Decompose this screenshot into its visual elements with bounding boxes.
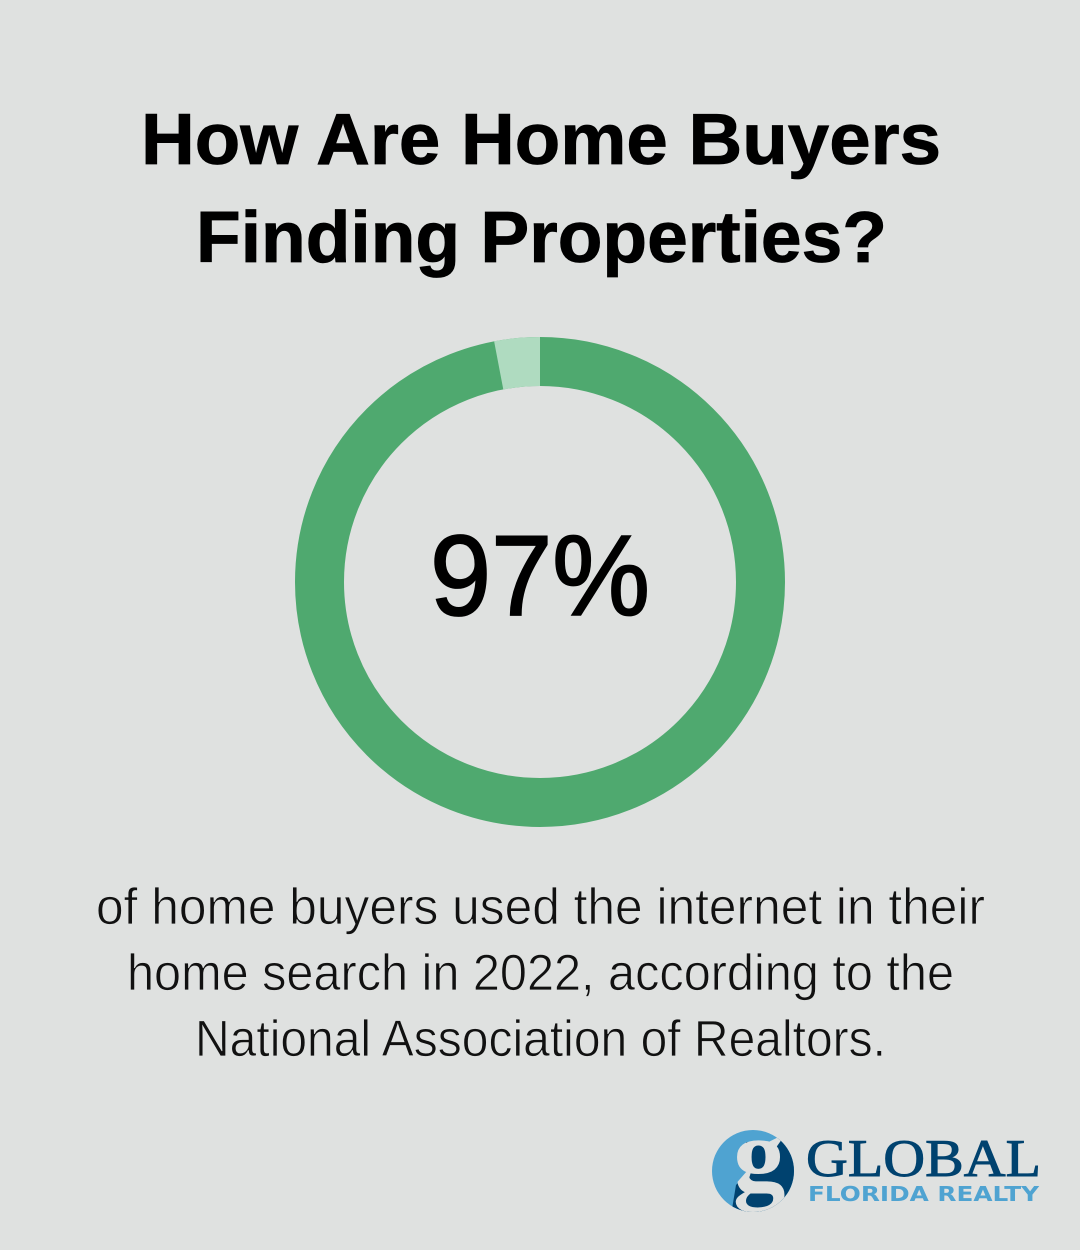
icon: g monogram circle: g — [733, 1096, 786, 1213]
description text: National Association of Realtors. — [195, 1010, 886, 1067]
title: How Are Home Buyers — [141, 100, 941, 180]
wordmark: GLOBAL: GLOBAL — [806, 1130, 1041, 1188]
wordmark: FLORIDA REALTY: FLORIDA REALTY — [808, 1182, 1040, 1206]
title — [141, 100, 941, 278]
donut chart: 97% — [320, 337, 760, 802]
icon: g monogram circle — [712, 1130, 794, 1212]
center value: 97% — [430, 513, 650, 640]
title: Finding Properties? — [196, 198, 887, 278]
logo: Global Florida Realty — [712, 1130, 1040, 1212]
description text: home search in 2022, according to the — [127, 944, 954, 1001]
description text: of home buyers used the internet in their — [96, 878, 985, 935]
donut segment: remaining 3% — [494, 337, 540, 390]
description text — [96, 878, 985, 1067]
